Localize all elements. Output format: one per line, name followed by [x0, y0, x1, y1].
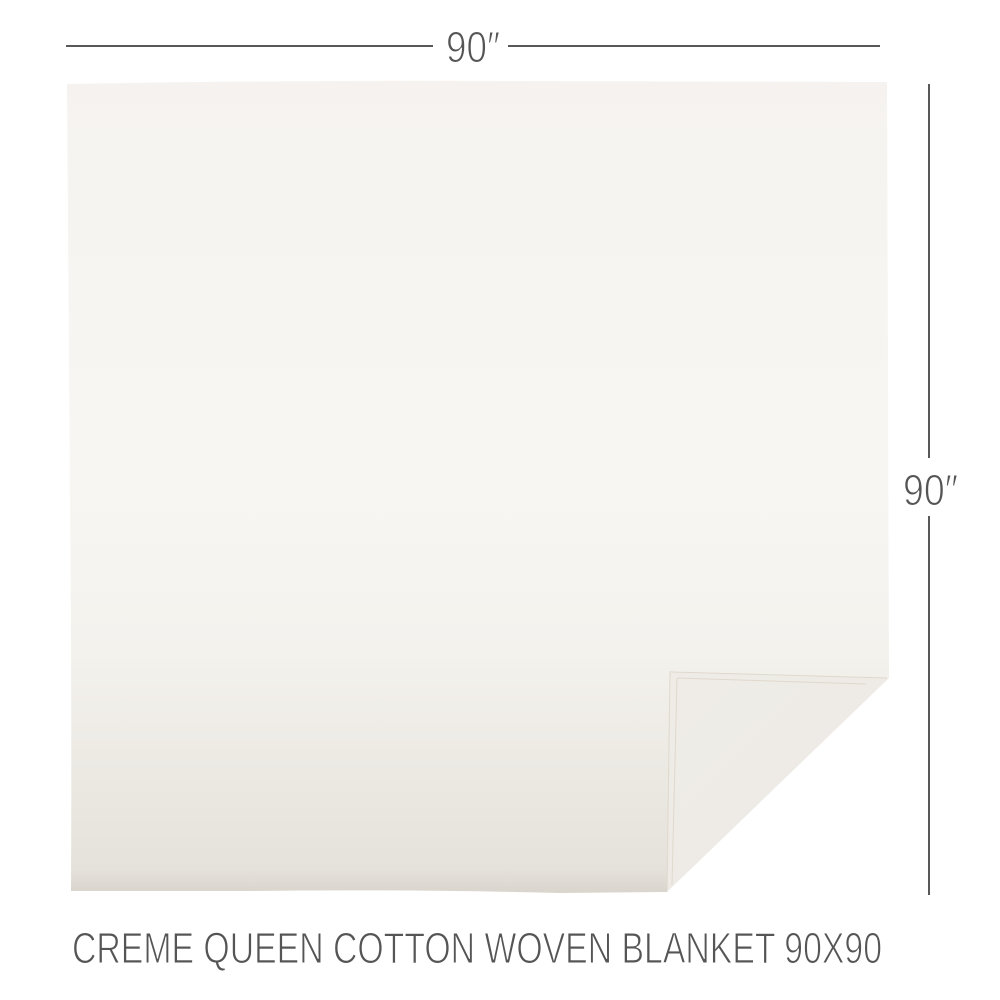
fold hem	[667, 671, 887, 892]
height dimension: 90 inches: 90″	[903, 466, 958, 515]
blanket body	[67, 81, 889, 893]
width dimension: 90 inches: 90″	[446, 23, 500, 72]
folded corner flap	[667, 671, 889, 892]
blanket with folded corner	[67, 81, 889, 893]
